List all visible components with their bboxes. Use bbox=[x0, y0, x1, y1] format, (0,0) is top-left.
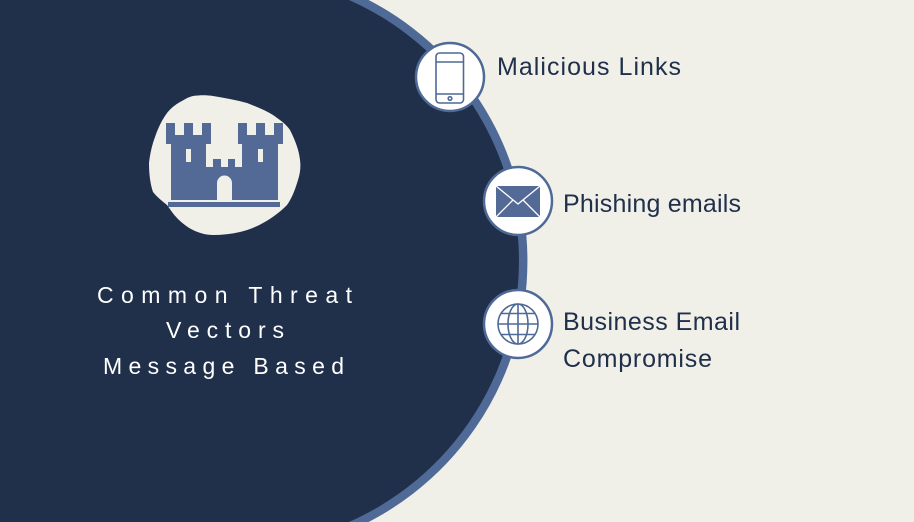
label: business email compromise bbox=[563, 308, 740, 373]
label: phishing emails: Phishing emails bbox=[563, 190, 741, 218]
heading: common threat vectors message based: Common Threat bbox=[97, 282, 353, 308]
heading: common threat vectors message based bbox=[97, 282, 353, 379]
label: malicious links: Malicious Links bbox=[497, 53, 681, 81]
label: business email compromise: Compromise bbox=[563, 345, 712, 373]
icon: phone bbox=[416, 43, 484, 111]
label: business email compromise: Business Email bbox=[563, 308, 740, 336]
heading: common threat vectors message based: Vectors bbox=[166, 317, 284, 343]
icon: globe bbox=[484, 290, 552, 358]
icon: envelope bbox=[484, 167, 552, 235]
castle bbox=[166, 123, 283, 207]
heading: common threat vectors message based: Message Based bbox=[103, 353, 344, 379]
icon: castle on blob bbox=[149, 95, 300, 235]
blob bbox=[149, 95, 300, 235]
panel: dark left area with arc border bbox=[0, 0, 523, 522]
